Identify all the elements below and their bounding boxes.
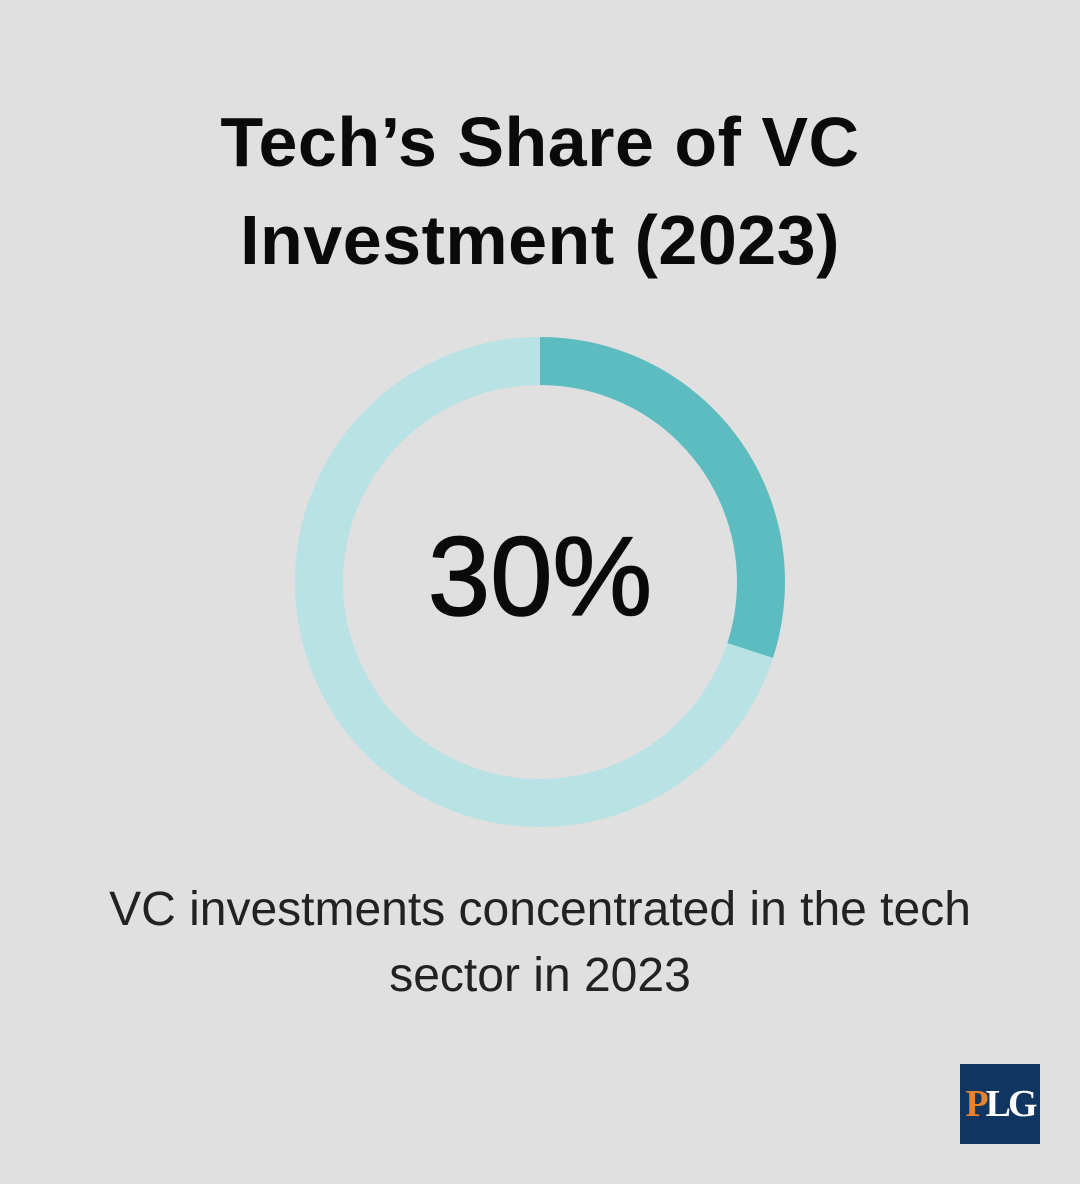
- logo: [960, 1064, 1040, 1144]
- caption: sector in 2023: [389, 949, 691, 1002]
- title: Tech’s Share of VC: [220, 103, 860, 181]
- title: [220, 103, 860, 279]
- caption: VC investments concentrated in the tech: [109, 883, 971, 936]
- title: Investment (2023): [240, 201, 840, 279]
- donut chart: 30%: [428, 514, 652, 639]
- logo: PLG: [965, 1083, 1035, 1125]
- caption: [109, 883, 971, 1002]
